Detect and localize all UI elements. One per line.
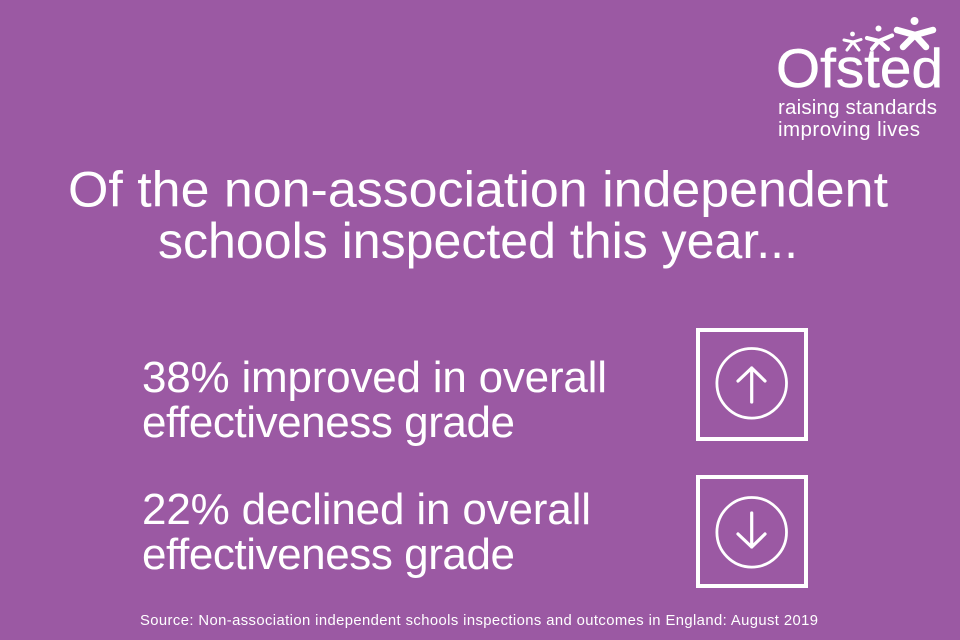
icon: three figures bbox=[844, 17, 933, 50]
logo strapline line 1: raising standards bbox=[778, 96, 937, 119]
source note: Source: Non-association independent schools inspections and outcomes in England: August 2019 bbox=[140, 613, 818, 629]
title: Of the non-association independent bbox=[68, 162, 888, 218]
icon: up arrow in box bbox=[698, 330, 806, 439]
text: improved statistic: effectiveness grade bbox=[142, 398, 515, 447]
logo strapline line 2: improving lives bbox=[778, 118, 920, 141]
text: declined statistic bbox=[142, 485, 591, 579]
text: improved statistic: 38% improved in overall bbox=[142, 353, 607, 402]
text: improved statistic bbox=[142, 353, 607, 447]
text: declined statistic: effectiveness grade bbox=[142, 530, 515, 579]
logo: Ofsted bbox=[776, 17, 943, 141]
title bbox=[68, 162, 888, 269]
title: schools inspected this year... bbox=[158, 213, 798, 269]
icon: down arrow in box bbox=[698, 477, 806, 586]
logo wordmark: Ofsted bbox=[776, 37, 943, 99]
text: declined statistic: 22% declined in overall bbox=[142, 485, 591, 534]
